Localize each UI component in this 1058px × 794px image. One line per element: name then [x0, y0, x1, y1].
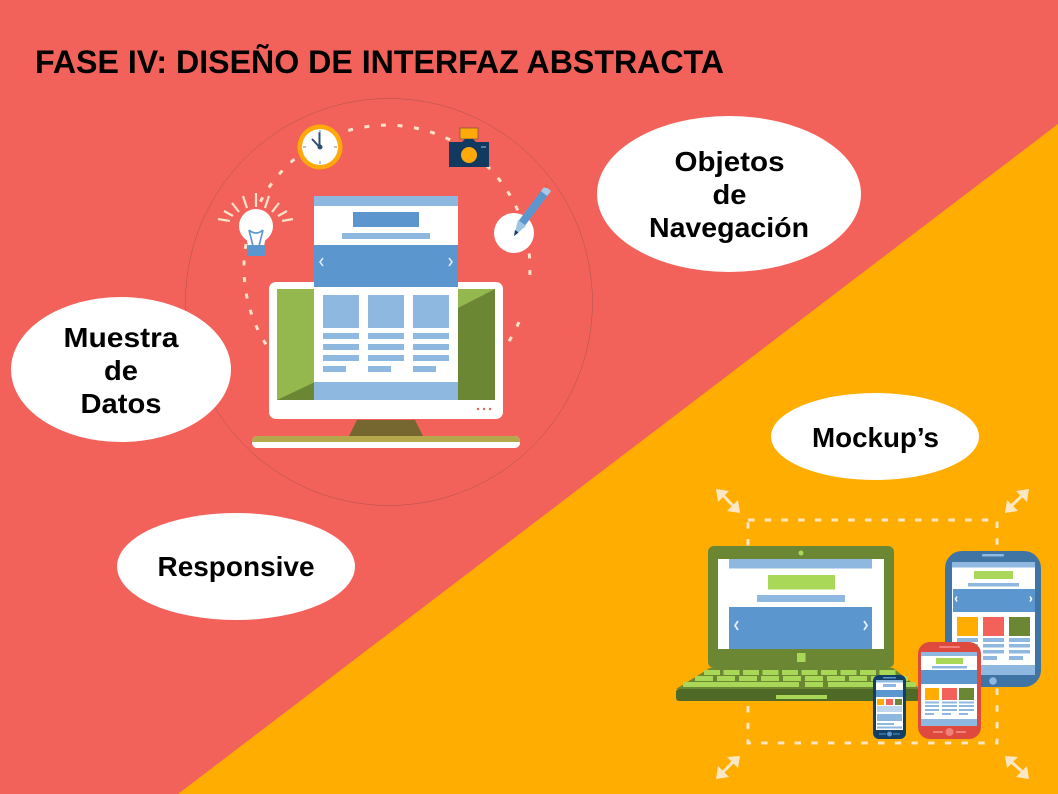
icon: clock [298, 124, 342, 170]
illustration: responsive devices [676, 489, 1041, 779]
bubble: Responsive: Responsive [158, 551, 314, 582]
icon: pencil on circle [494, 184, 548, 253]
bubble: Muestra de Datos: de [104, 355, 138, 386]
bubble: Objetos de Navegación: Objetos [674, 146, 784, 177]
laptop [676, 546, 920, 701]
bubble: Muestra de Datos [11, 297, 231, 442]
bubble: Objetos de Navegación: Navegación [649, 212, 809, 243]
icon: light bulb [218, 193, 293, 256]
bubble: Muestra de Datos: Muestra [64, 322, 179, 353]
background: orange diagonal panel [178, 124, 1058, 794]
bubble: Mockup's: Mockup’s [812, 422, 939, 453]
bubble: Responsive [117, 513, 355, 620]
bubble: Objetos de Navegación: de [712, 179, 746, 210]
arrows: four corners [716, 489, 1029, 779]
monitor base [252, 436, 520, 448]
phone: navy [873, 675, 906, 739]
tablet [945, 551, 1041, 687]
phone: red [918, 642, 981, 739]
bubble: Mockup's [771, 393, 979, 480]
web page mockup [314, 196, 458, 400]
icon: camera [449, 128, 489, 167]
monitor stand [349, 420, 423, 436]
bubble: Muestra de Datos: Datos [80, 388, 162, 419]
monitor [252, 282, 520, 448]
dashed frame [748, 520, 997, 743]
bubble: Objetos de Navegación [597, 116, 861, 272]
illustration: web design monitor in circle [186, 98, 592, 506]
title: FASE IV: DISEÑO DE INTERFAZ ABSTRACTA [35, 44, 724, 80]
